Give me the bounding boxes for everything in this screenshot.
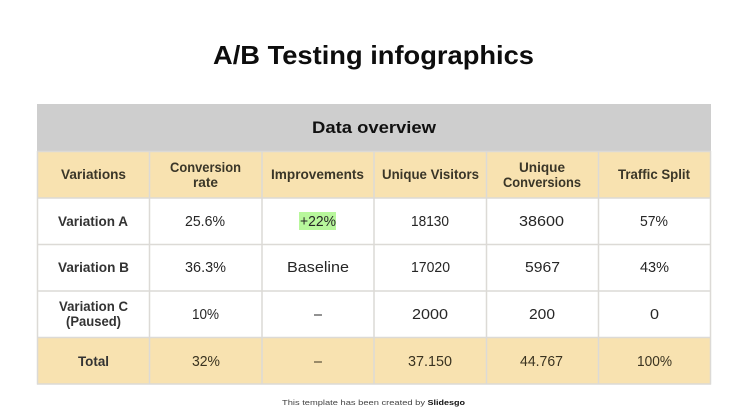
row: Variation A: Variation A xyxy=(58,214,128,229)
row: Variation A: 38600 xyxy=(519,214,564,230)
footer credit xyxy=(282,398,465,407)
row: Variation C (Paused): 2000 xyxy=(412,307,448,323)
footer credit: Slidesgo xyxy=(428,398,465,407)
footer credit: This template has been created by xyxy=(282,398,425,407)
row: Variation C (Paused): 0 xyxy=(650,307,659,323)
row: Total xyxy=(37,337,711,384)
row: Variation B: 36.3% xyxy=(185,260,226,276)
row: Total: Total xyxy=(78,354,109,369)
row: Total: 100% xyxy=(637,354,672,370)
row: Variation B: 43% xyxy=(640,260,669,276)
column header row: Variations xyxy=(61,167,126,182)
row: Variation C (Paused): – xyxy=(314,307,323,323)
row: Variation B: Baseline xyxy=(287,260,349,276)
row: Total: 44.767 xyxy=(520,354,563,370)
column header row: Improvements xyxy=(271,167,364,182)
row: Variation B: 17020 xyxy=(411,260,450,276)
row: Total: – xyxy=(314,354,323,370)
row: Variation A: 57% xyxy=(640,214,668,230)
row: Variation A: 18130 xyxy=(411,214,449,230)
row: Variation B xyxy=(37,244,711,291)
row: Variation C (Paused) xyxy=(37,291,711,337)
row: Variation B: Variation B xyxy=(58,260,129,275)
column header row xyxy=(37,151,711,198)
title: A/B Testing infographics xyxy=(213,40,534,70)
column header row: rate xyxy=(193,175,218,190)
column header row: Conversion xyxy=(170,160,241,175)
column header row: Unique xyxy=(519,160,565,175)
row: Variation A: +22% xyxy=(300,214,336,230)
row: Variation C (Paused): (Paused) xyxy=(66,314,121,329)
row: Total: 32% xyxy=(192,354,220,370)
table title band: Data overview xyxy=(312,118,437,137)
column header row: Traffic Split xyxy=(618,167,690,182)
row: Total: 37.150 xyxy=(408,354,452,370)
row: Variation C (Paused): 200 xyxy=(529,307,555,323)
row: Variation A xyxy=(37,198,711,244)
panel: data overview table xyxy=(37,104,711,384)
row: Variation B: 5967 xyxy=(525,260,560,276)
column header row: Unique Visitors xyxy=(382,167,479,182)
row: Variation A: 25.6% xyxy=(185,214,225,230)
table title band xyxy=(37,104,711,151)
column header row: Conversions xyxy=(503,175,581,190)
row: Variation C (Paused): Variation C xyxy=(59,299,128,314)
row: Variation C (Paused): 10% xyxy=(192,307,219,323)
